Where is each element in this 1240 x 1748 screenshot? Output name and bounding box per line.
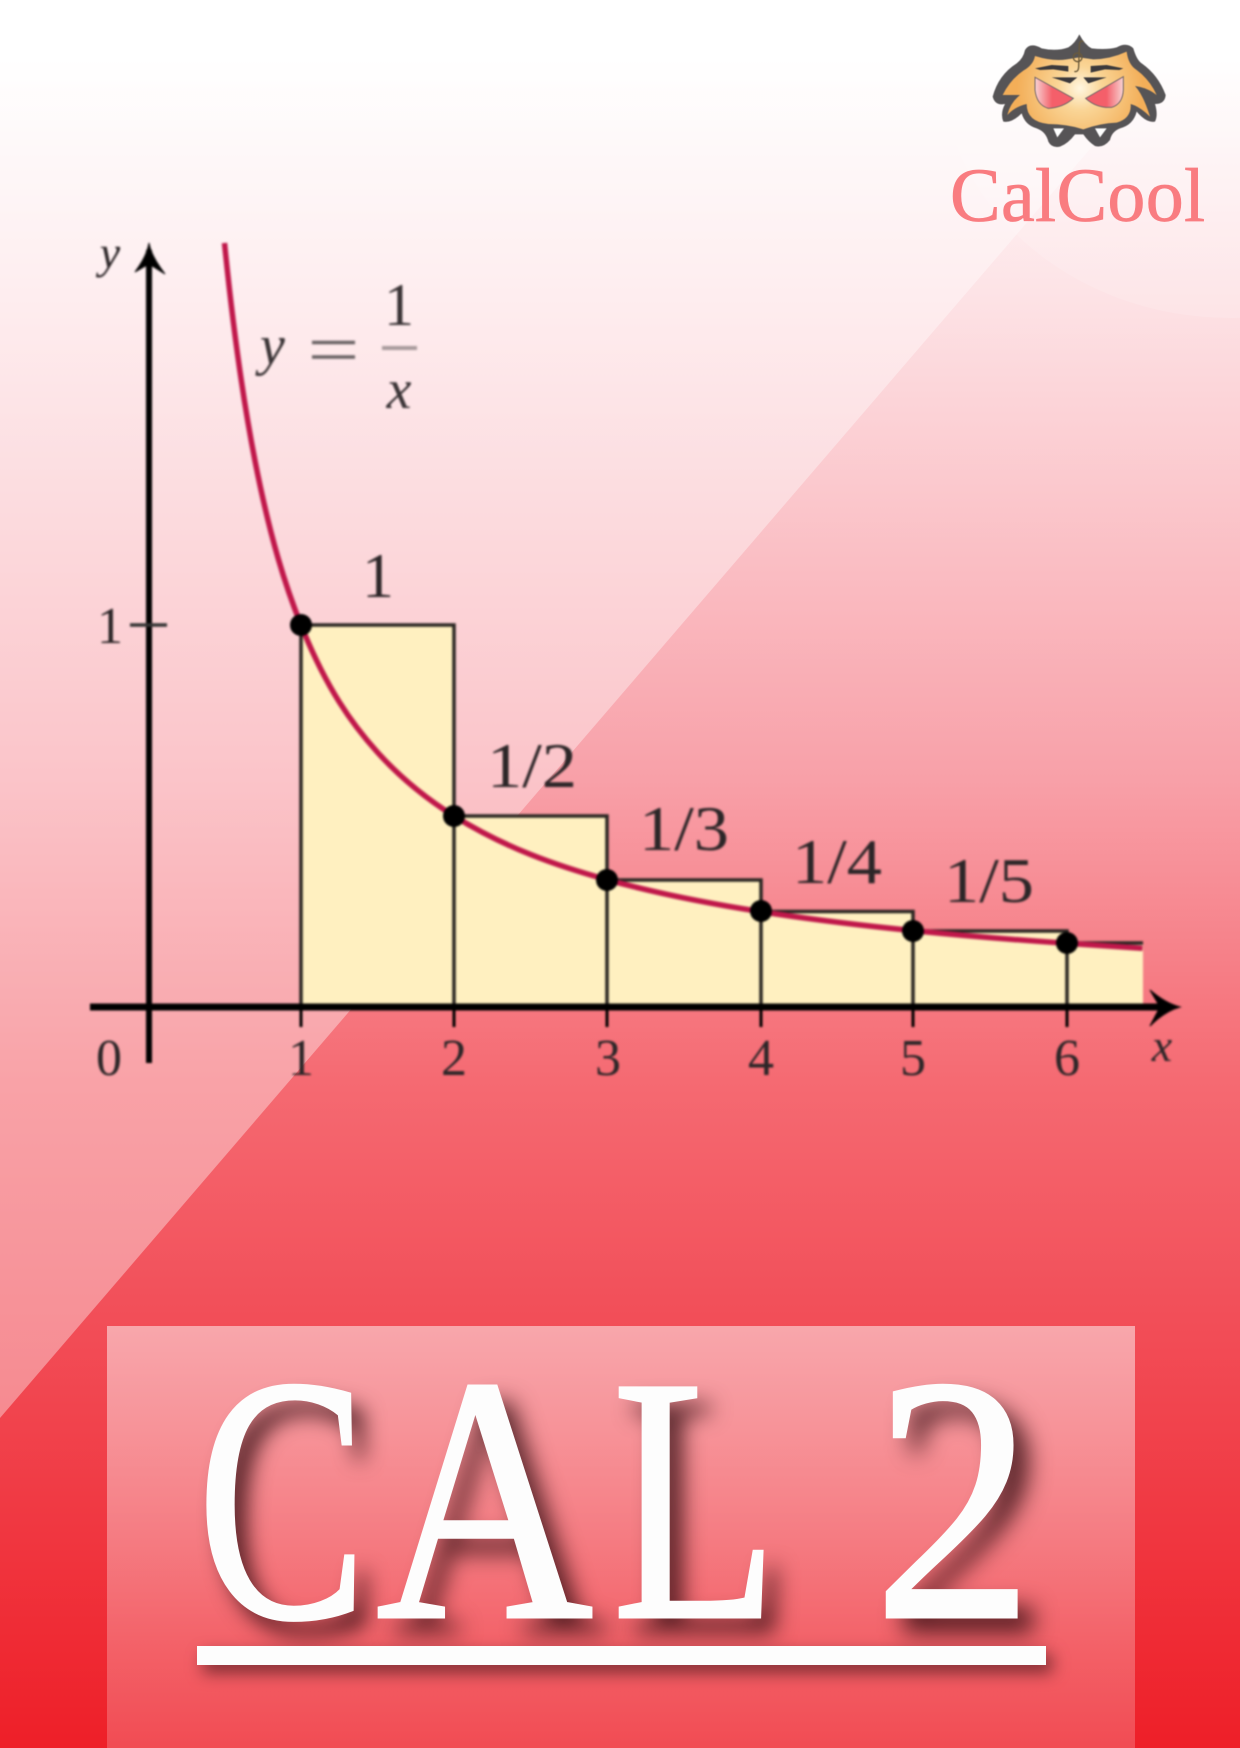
title text: L bbox=[612, 1305, 779, 1693]
axes bbox=[90, 243, 1180, 1063]
title text: 2 bbox=[873, 1305, 1034, 1693]
axis labels bbox=[96, 227, 1173, 1087]
step height labels: 1/2 bbox=[487, 730, 577, 801]
axis labels: 3 bbox=[595, 1030, 621, 1087]
rectangles under the steps bbox=[301, 625, 1143, 1007]
step height labels: 1/4 bbox=[792, 826, 882, 897]
y equals one over x label bbox=[255, 272, 417, 421]
logo icon: tiger mask bbox=[992, 34, 1166, 148]
step height labels: 1/3 bbox=[639, 793, 729, 864]
axis labels: 2 bbox=[441, 1030, 467, 1087]
title text: A bbox=[376, 1305, 593, 1693]
axis labels: 0 bbox=[96, 1030, 122, 1087]
data points bbox=[290, 614, 1078, 954]
axis labels: x bbox=[1151, 1020, 1173, 1071]
step height labels: 1/5 bbox=[944, 845, 1034, 916]
logo wordmark: CalCool bbox=[950, 154, 1205, 238]
title panel bbox=[107, 1326, 1135, 1748]
curve y = 1/x bbox=[224, 243, 1142, 948]
y equals one over x label: y bbox=[255, 315, 285, 377]
step height labels: 1 bbox=[362, 540, 394, 611]
axis labels: 5 bbox=[900, 1030, 926, 1087]
axis labels: 1 bbox=[97, 598, 123, 655]
y equals one over x label: 1 bbox=[384, 272, 414, 338]
axis labels: 6 bbox=[1054, 1030, 1080, 1087]
axis labels: 4 bbox=[748, 1030, 774, 1087]
title text: C bbox=[197, 1305, 367, 1693]
axis labels: y bbox=[96, 227, 121, 278]
title underline bbox=[197, 1646, 1046, 1665]
y equals one over x label: x bbox=[386, 359, 412, 421]
axis labels: 1 bbox=[288, 1030, 314, 1087]
graph: y = 1/x with rectangles bbox=[88, 227, 1182, 1087]
step height labels bbox=[362, 540, 1034, 916]
